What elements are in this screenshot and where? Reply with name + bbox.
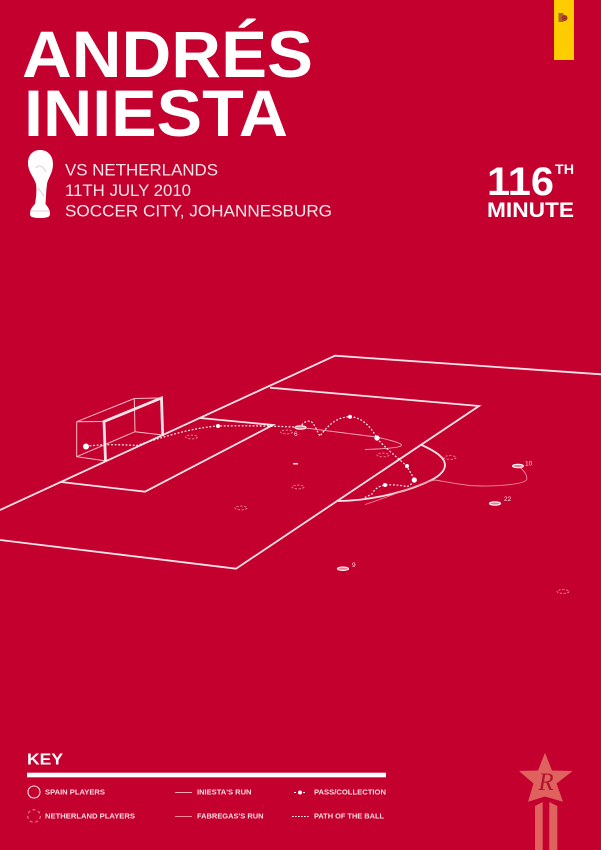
Spain players: 6	[294, 431, 298, 438]
title	[22, 17, 313, 150]
Spain players	[293, 426, 533, 570]
logo: star with R monogram	[519, 753, 573, 850]
key heading: KEY	[27, 752, 63, 768]
pass and collection points	[83, 415, 417, 487]
key item: Fabregas's run: FABREGAS'S RUN	[197, 814, 264, 820]
key item: Netherland players	[28, 810, 135, 822]
Spain players: 9	[352, 562, 356, 569]
minute label: MINUTE	[487, 199, 574, 222]
match details: SOCCER CITY, JOHANNESBURG	[65, 202, 332, 220]
goal	[77, 398, 163, 461]
Spain players: 10	[525, 460, 533, 468]
key item: Iniesta's run: INIESTA'S RUN	[197, 790, 252, 796]
minute label: 116	[487, 160, 554, 204]
key item: Iniesta's run	[175, 790, 252, 796]
match details: VS NETHERLANDS	[65, 160, 218, 180]
key item: path of the ball: PATH OF THE BALL	[314, 814, 385, 820]
match details	[65, 160, 332, 220]
football pitch markings	[0, 356, 601, 569]
key rule	[27, 773, 386, 777]
key item: Netherland players: NETHERLAND PLAYERS	[45, 814, 135, 820]
path of the ball	[86, 417, 414, 498]
Spain players: 22	[504, 496, 512, 503]
minute label: TH	[555, 161, 574, 177]
minute label	[487, 160, 574, 222]
key item: pass/collection: PASS/COLLECTION	[314, 790, 386, 796]
icon: Spanish flag stripe	[554, 0, 574, 60]
Netherlands players	[186, 430, 569, 593]
logo: star with R monogram: R	[537, 769, 554, 796]
Iniesta's run	[300, 427, 402, 450]
key item: Spain players	[28, 786, 105, 798]
key item: Spain players: SPAIN PLAYERS	[45, 790, 105, 796]
title: INIESTA	[24, 76, 288, 150]
title: ANDRÉS	[22, 17, 313, 91]
key	[27, 752, 386, 822]
icon: World Cup trophy	[28, 150, 53, 218]
match details: 11TH JULY 2010	[65, 181, 191, 200]
Fabregas's run	[365, 466, 527, 504]
